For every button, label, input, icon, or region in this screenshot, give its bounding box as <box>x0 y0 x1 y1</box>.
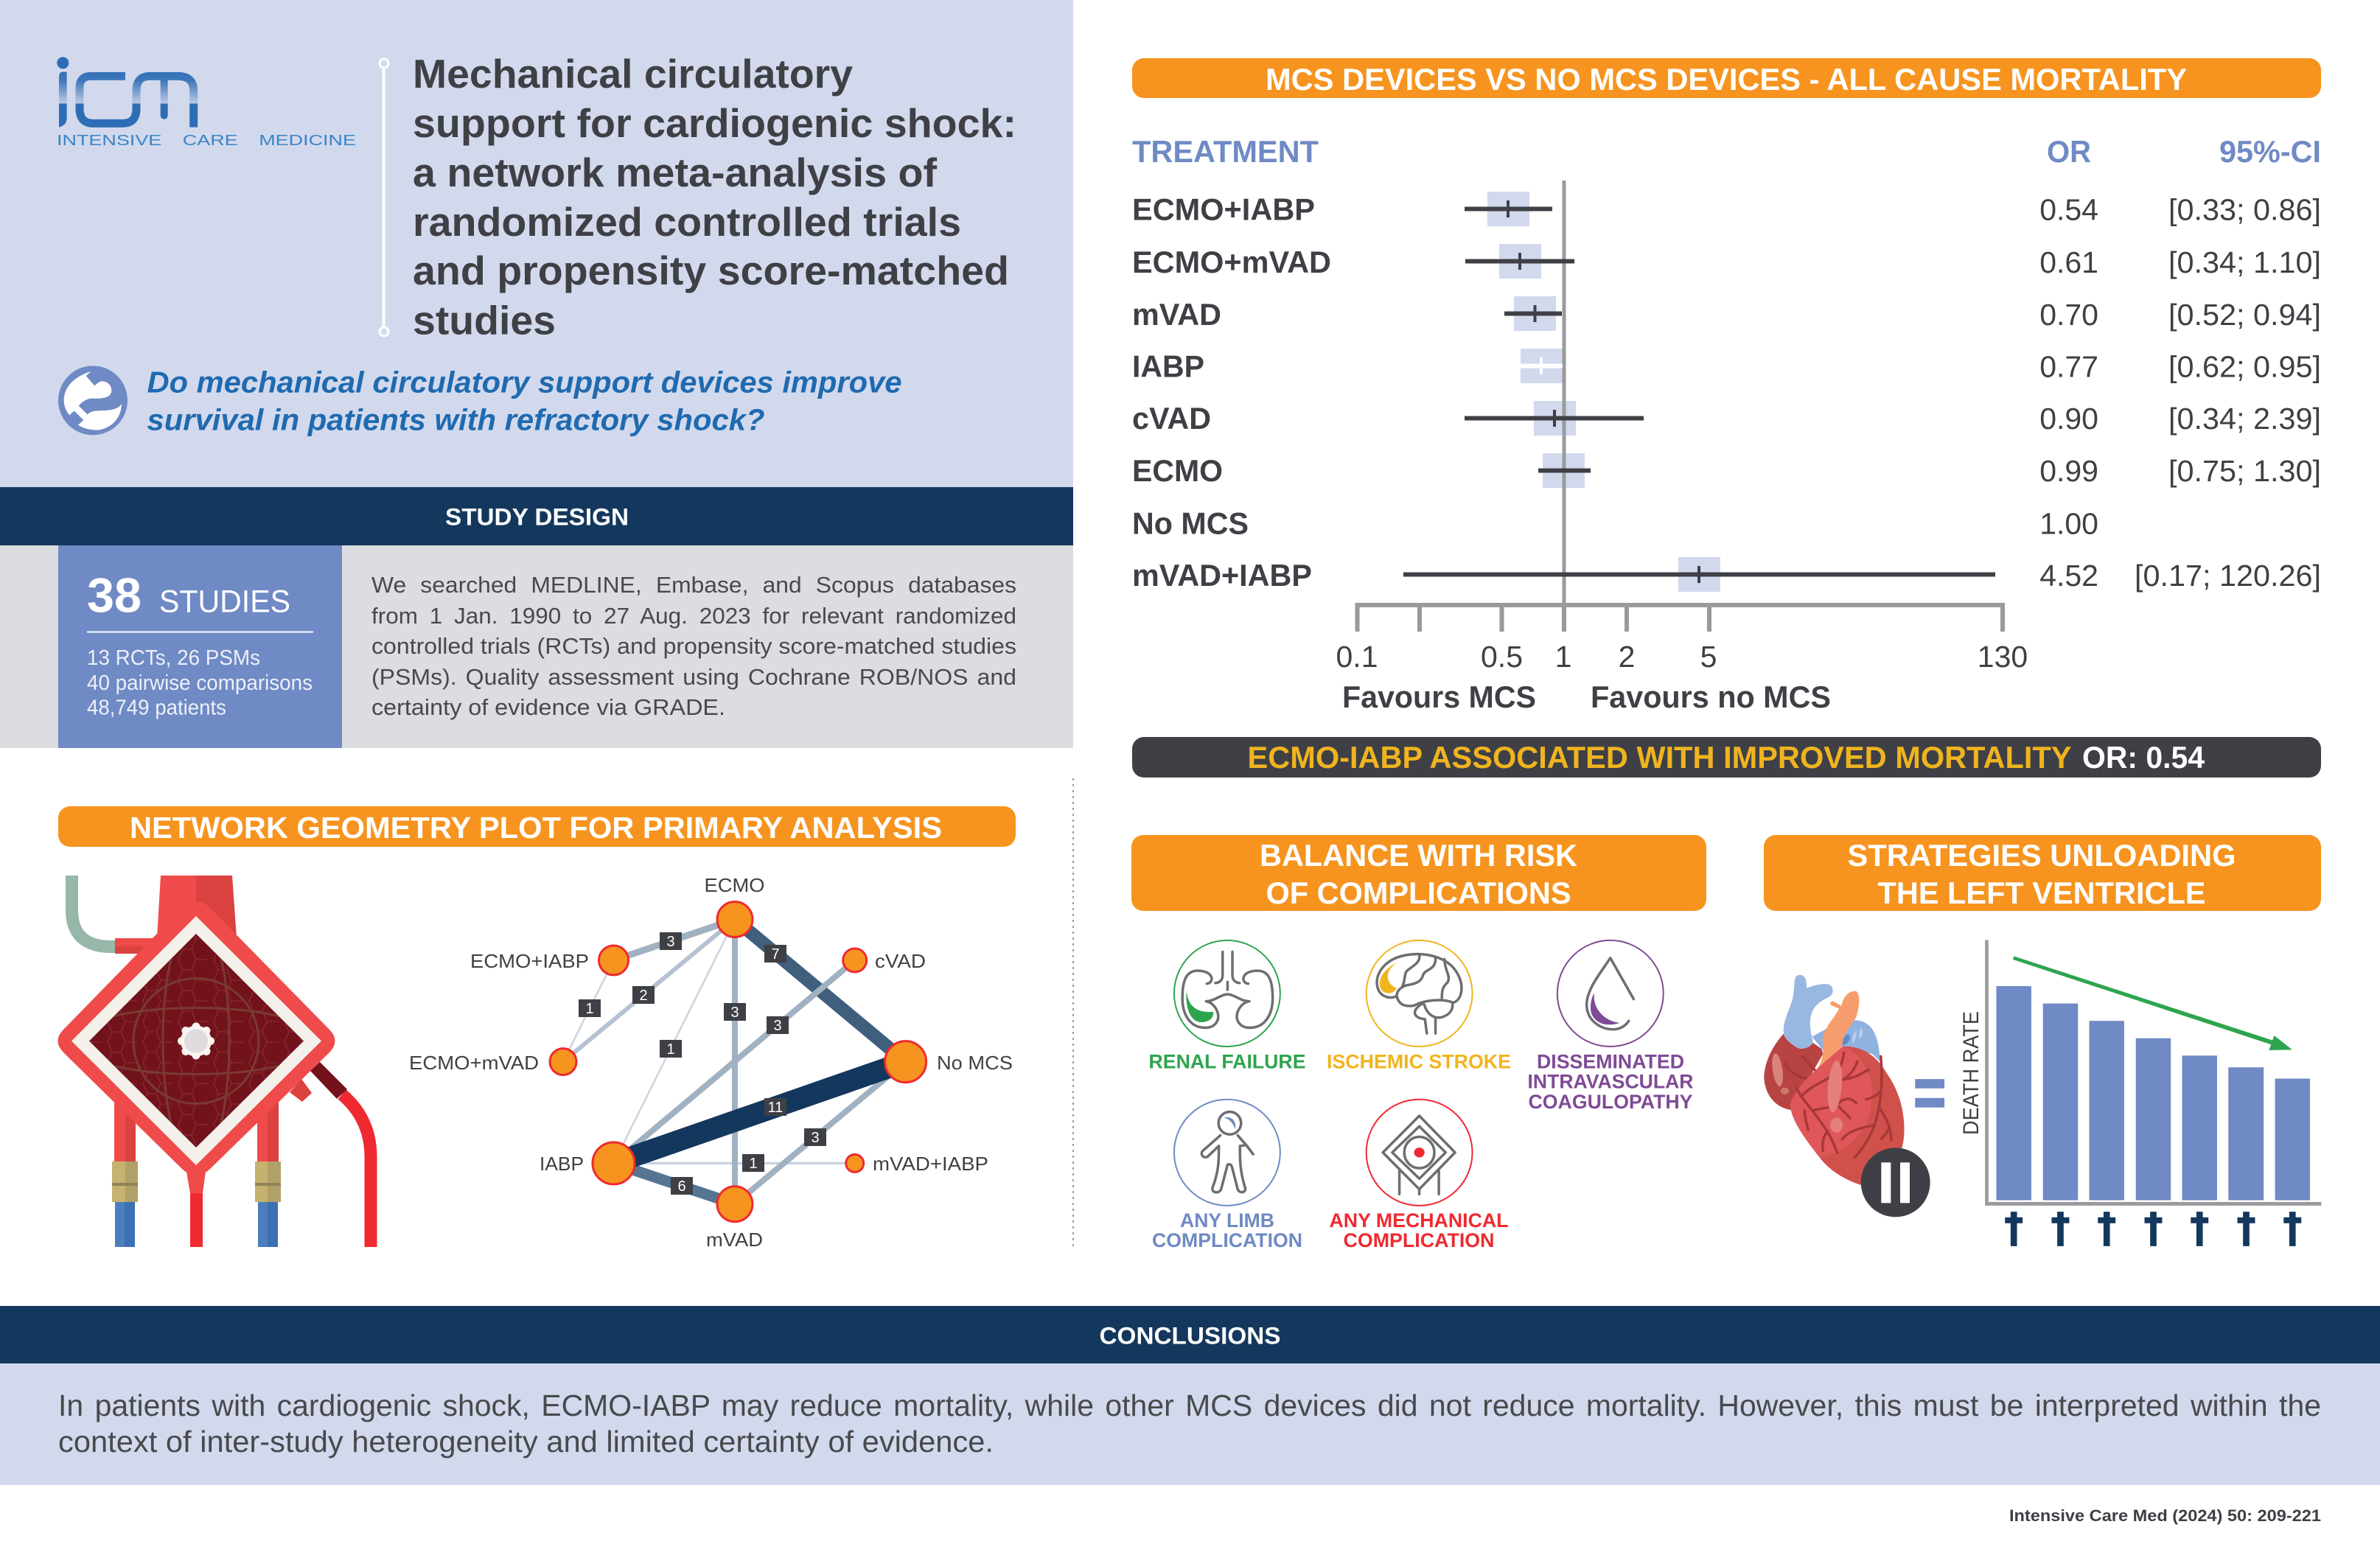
node labels: mVAD <box>706 1229 763 1251</box>
result callout: ECMO-IABP ASSOCIATED WITH IMPROVED MORTALITY <box>1247 740 2071 775</box>
edge counts <box>579 932 826 1195</box>
citation: Intensive Care Med (2024) 50: 209-221 <box>2009 1506 2321 1525</box>
label: mechanical complication <box>1330 1209 1508 1251</box>
label: mechanical complication: COMPLICATION <box>1343 1229 1495 1251</box>
study description: (PSMs). Quality assessment using Cochrane ROB/NOS and <box>371 664 1016 690</box>
label: mechanical complication: ANY MECHANICAL <box>1330 1209 1508 1232</box>
treatment labels: mVAD+IABP <box>1132 558 1312 593</box>
confidence intervals <box>2135 193 2321 593</box>
study design heading: STUDY DESIGN <box>445 504 629 531</box>
illustration: ECMO device <box>57 876 371 1247</box>
forest plot axis: 1 <box>1555 640 1571 674</box>
panel: study design <box>0 545 1073 748</box>
unloading heading: STRATEGIES UNLOADING <box>1847 838 2236 873</box>
forest plot axis: 2 <box>1619 640 1635 674</box>
odds ratio values: 0.61 <box>2039 245 2098 279</box>
odds ratio values: 0.70 <box>2039 298 2098 332</box>
logo: ICM Intensive Care Medicine <box>57 57 356 149</box>
icon: mechanical complication <box>1367 1100 1473 1206</box>
downward trend arrow <box>2013 957 2292 1050</box>
treatment labels <box>1132 192 1331 593</box>
node labels: mVAD+IABP <box>873 1153 988 1175</box>
icon: limb complication <box>1174 1100 1280 1206</box>
illustration: heart paused <box>1764 975 1930 1217</box>
forest plot axis: 130 <box>1978 640 2028 674</box>
label: disseminated intravascular coagulopathy: DISSEMINATED <box>1537 1051 1684 1073</box>
edge counts: 1 <box>749 1156 758 1172</box>
study description <box>371 572 1016 720</box>
study description: We searched MEDLINE, Embase, and Scopus databases <box>371 572 1016 598</box>
odds ratio values: 0.90 <box>2039 402 2098 436</box>
forest plot table header <box>1132 134 2321 169</box>
unloading heading <box>1764 835 2321 911</box>
treatment labels: ECMO <box>1132 453 1223 488</box>
result callout: OR: 0.54 <box>2082 740 2205 775</box>
forest plot heading: MCS DEVICES VS NO MCS DEVICES - ALL CAUSE MORTALITY <box>1266 62 2187 97</box>
odds ratio values: 4.52 <box>2039 559 2098 593</box>
chart: death rate bars <box>1959 940 2321 1246</box>
odds ratio values: 1.00 <box>2039 507 2098 541</box>
node labels: No MCS <box>937 1052 1013 1074</box>
odds ratio values: 0.77 <box>2039 349 2098 383</box>
confidence intervals: [0.52; 0.94] <box>2168 298 2321 332</box>
forest plot table header: OR <box>2047 134 2091 169</box>
title divider <box>380 59 388 336</box>
label: disseminated intravascular coagulopathy: INTRAVASCULAR <box>1527 1070 1694 1092</box>
edge counts: 3 <box>666 934 675 950</box>
forest plot axis: 0.5 <box>1481 640 1523 674</box>
study stats box: 40 pairwise comparisons <box>87 671 313 695</box>
research question: Do mechanical circulatory support devices improve <box>147 366 902 399</box>
title: and propensity score-matched <box>413 248 1009 293</box>
title: a network meta-analysis of <box>413 150 938 195</box>
treatment labels: IABP <box>1132 349 1204 383</box>
logo: ICM Intensive Care Medicine: INTENSIVE CARE MEDICINE <box>57 132 356 149</box>
study stats box: 48,749 patients <box>87 696 226 719</box>
forest plot heading <box>1132 58 2321 98</box>
node labels: IABP <box>540 1153 584 1175</box>
edge counts: 7 <box>771 946 780 963</box>
title: support for cardiogenic shock: <box>413 100 1016 146</box>
odds ratio values: 0.54 <box>2039 193 2098 227</box>
mortality crosses <box>2005 1212 2301 1246</box>
chart: network geometry plot <box>409 874 1013 1251</box>
title: Mechanical circulatory <box>413 51 853 97</box>
edge counts: 2 <box>639 988 648 1004</box>
edge counts: 6 <box>677 1178 686 1195</box>
label: ischemic stroke: ISCHEMIC STROKE <box>1327 1051 1511 1073</box>
label: disseminated intravascular coagulopathy: COAGULOPATHY <box>1529 1091 1692 1113</box>
research question <box>147 366 902 436</box>
forest plot axis: Favours no MCS <box>1591 680 1831 714</box>
equals sign <box>1915 1079 1944 1108</box>
treatment labels: No MCS <box>1132 506 1249 541</box>
title: studies <box>413 298 556 343</box>
treatment labels: ECMO+IABP <box>1132 192 1315 227</box>
study design heading <box>0 487 1073 545</box>
study stats box: STUDIES <box>159 584 290 619</box>
complications heading <box>1131 835 1706 911</box>
complications heading: BALANCE WITH RISK <box>1260 838 1577 873</box>
confidence intervals: [0.62; 0.95] <box>2168 349 2321 383</box>
odds ratio values: 0.99 <box>2039 454 2098 488</box>
forest plot table header: 95%-CI <box>2219 134 2321 169</box>
network heading: NETWORK GEOMETRY PLOT FOR PRIMARY ANALYSIS <box>130 811 942 845</box>
treatment labels: ECMO+mVAD <box>1132 245 1331 279</box>
research question: survival in patients with refractory shock? <box>147 402 765 436</box>
treatment labels: cVAD <box>1132 401 1211 436</box>
title <box>413 51 1016 343</box>
study description: controlled trials (RCTs) and propensity score-matched studies <box>371 633 1016 659</box>
node labels <box>409 874 1013 1251</box>
confidence intervals: [0.17; 120.26] <box>2135 559 2321 593</box>
edge counts: 3 <box>773 1018 782 1034</box>
label: renal failure: RENAL FAILURE <box>1148 1051 1306 1073</box>
chart: forest plot <box>1336 181 2028 714</box>
label: disseminated intravascular coagulopathy <box>1527 1051 1694 1113</box>
complications heading: OF COMPLICATIONS <box>1266 876 1571 910</box>
edge counts: 11 <box>768 1100 783 1116</box>
icon: question swirl <box>58 366 128 435</box>
forest plot axis: 5 <box>1700 640 1717 674</box>
edge counts: 3 <box>811 1130 820 1146</box>
conclusions heading: CONCLUSIONS <box>1100 1322 1281 1349</box>
conclusions heading <box>0 1306 2380 1363</box>
edge counts: 3 <box>730 1005 739 1021</box>
forest plot axis: 0.1 <box>1336 640 1378 674</box>
panel: header background <box>0 0 1073 487</box>
network nodes <box>550 902 926 1222</box>
edge counts: 1 <box>666 1041 675 1058</box>
study description: from 1 Jan. 1990 to 27 Aug. 2023 for relevant randomized <box>371 603 1016 629</box>
study stats box: 13 RCTs, 26 PSMs <box>87 646 260 670</box>
icon: renal failure <box>1174 940 1280 1047</box>
node labels: cVAD <box>875 950 926 972</box>
forest plot table header: TREATMENT <box>1132 134 1319 169</box>
node labels: ECMO+mVAD <box>409 1052 539 1074</box>
label: limb complication: ANY LIMB <box>1180 1209 1274 1232</box>
node labels: ECMO+IABP <box>470 950 589 972</box>
confidence intervals: [0.75; 1.30] <box>2168 454 2321 488</box>
confidence intervals: [0.34; 1.10] <box>2168 245 2321 279</box>
forest plot axis: Favours MCS <box>1342 680 1536 714</box>
forest plot axis <box>1336 605 2028 714</box>
odds ratio values <box>2039 193 2098 593</box>
icon: disseminated intravascular coagulopathy <box>1557 940 1664 1047</box>
label: limb complication <box>1152 1209 1302 1251</box>
study description: certainty of evidence via GRADE. <box>371 694 725 720</box>
unloading heading: THE LEFT VENTRICLE <box>1878 876 2205 910</box>
conclusions text <box>0 1363 2380 1485</box>
treatment labels: mVAD <box>1132 297 1221 332</box>
confidence intervals: [0.33; 0.86] <box>2168 193 2321 227</box>
network heading <box>58 806 1016 847</box>
chart: death rate bars: DEATH RATE <box>1959 1011 1983 1135</box>
conclusions text: In patients with cardiogenic shock, ECMO-IABP may reduce mortality, while other MCS devices did not reduce mortality. However, this must be interpreted within the <box>58 1388 2321 1422</box>
study stats box <box>58 545 342 748</box>
result callout <box>1132 737 2321 778</box>
icon: ischemic stroke <box>1367 940 1473 1047</box>
node labels: ECMO <box>705 874 765 896</box>
study stats box: 38 <box>87 567 142 622</box>
conclusions text: context of inter-study heterogeneity and limited certainty of evidence. <box>58 1425 994 1459</box>
label: limb complication: COMPLICATION <box>1152 1229 1302 1251</box>
confidence intervals: [0.34; 2.39] <box>2168 402 2321 436</box>
title: randomized controlled trials <box>413 199 961 245</box>
edge counts: 1 <box>585 1001 594 1017</box>
